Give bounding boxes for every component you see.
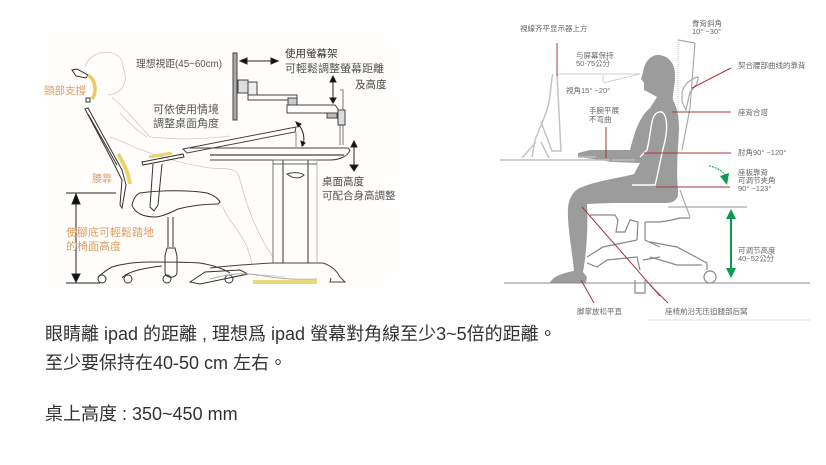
left diagram labels: 可配合身高調整 [322,189,396,202]
chair base [587,215,716,293]
green angle arrow [709,166,729,185]
right diagram labels: 手腕平展 [589,105,619,115]
right diagram labels: 視線齐平显示器上方 [520,23,588,33]
right diagram labels: 与屏幕保持 [576,50,614,60]
highlight: lumbar support [118,154,130,184]
sight lines [558,74,640,83]
red leader lines [557,43,731,303]
figure: seated person outline [85,52,285,277]
right diagram labels: 40~52公分 [738,254,775,263]
left diagram labels: 使用螢幕架 [285,47,338,60]
right diagram labels: 10° ~30° [692,27,721,36]
desk [500,157,635,160]
armrest and chair back [632,112,667,185]
panel: right side-view diagram [500,18,810,320]
highlight: neck support [88,75,95,99]
left diagram labels: 可輕鬆調整螢幕距離 [285,61,384,75]
orange body labels [44,84,154,253]
desk with tilting surface [183,127,350,282]
footrest highlight [253,280,317,284]
right diagram labels: 可调节夹角 [738,175,776,185]
chair: headrest and backrest [72,69,126,208]
right diagram labels [520,18,806,316]
orange body labels: 腰靠 [92,172,112,185]
highlight: armrest pad [149,153,172,157]
left diagram labels: 桌面高度 [322,175,364,188]
chair back outline [668,40,747,217]
right diagram labels: 肘角90° ~120° [738,147,786,157]
right diagram labels: 視角15° ~20° [566,85,610,95]
left diagram labels [136,47,396,202]
panel: left workstation diagram [44,36,396,286]
orange body labels: 使腳底可輕鬆踏地 [66,225,154,239]
right diagram labels: 50-75公分 [576,59,611,68]
right diagram labels: 契合腰部曲线的靠背 [738,60,806,70]
green height arrow [726,209,736,278]
figure: seated silhouette [550,55,679,283]
floor line [504,282,810,284]
monitor outline [522,74,561,158]
orange body labels: 的椅面高度 [66,239,121,253]
chair: seat and base [98,154,248,284]
right diagram labels: 脊背斜角 [692,18,722,28]
orange body labels: 頸部支撐 [44,84,86,97]
left diagram labels: 理想視距(45~60cm) [136,57,222,70]
left diagram labels: 可依使用情境 [153,102,219,116]
right diagram labels: 可调节高度 [738,245,776,255]
right diagram labels: 座椅前沿无压迫腿部后窝 [665,306,748,316]
right diagram labels: 座背合塔 [738,107,768,117]
right diagram labels: 不弯曲 [589,114,612,124]
arrows and dimension lines [66,58,358,283]
monitor and arm [233,53,345,145]
text block: viewing distance line one: 眼睛離 ipad 的距離 , 理想爲 ipad 螢幕對角線至少3~5倍的距離。 [45,324,557,344]
baseline under floor [648,319,810,321]
right diagram labels: 座板靠背 [738,167,768,177]
left diagram labels: 及高度 [355,78,387,91]
text block: viewing distance line two: 至少要保持在40-50 cm 左右。 [45,353,287,373]
left diagram labels: 調整桌面角度 [153,116,219,130]
right diagram labels: 90° ~123° [738,184,771,193]
right diagram labels: 脚掌放松平直 [577,306,622,316]
text block: desk height: 桌上高度 : 350~450 mm [45,404,238,424]
